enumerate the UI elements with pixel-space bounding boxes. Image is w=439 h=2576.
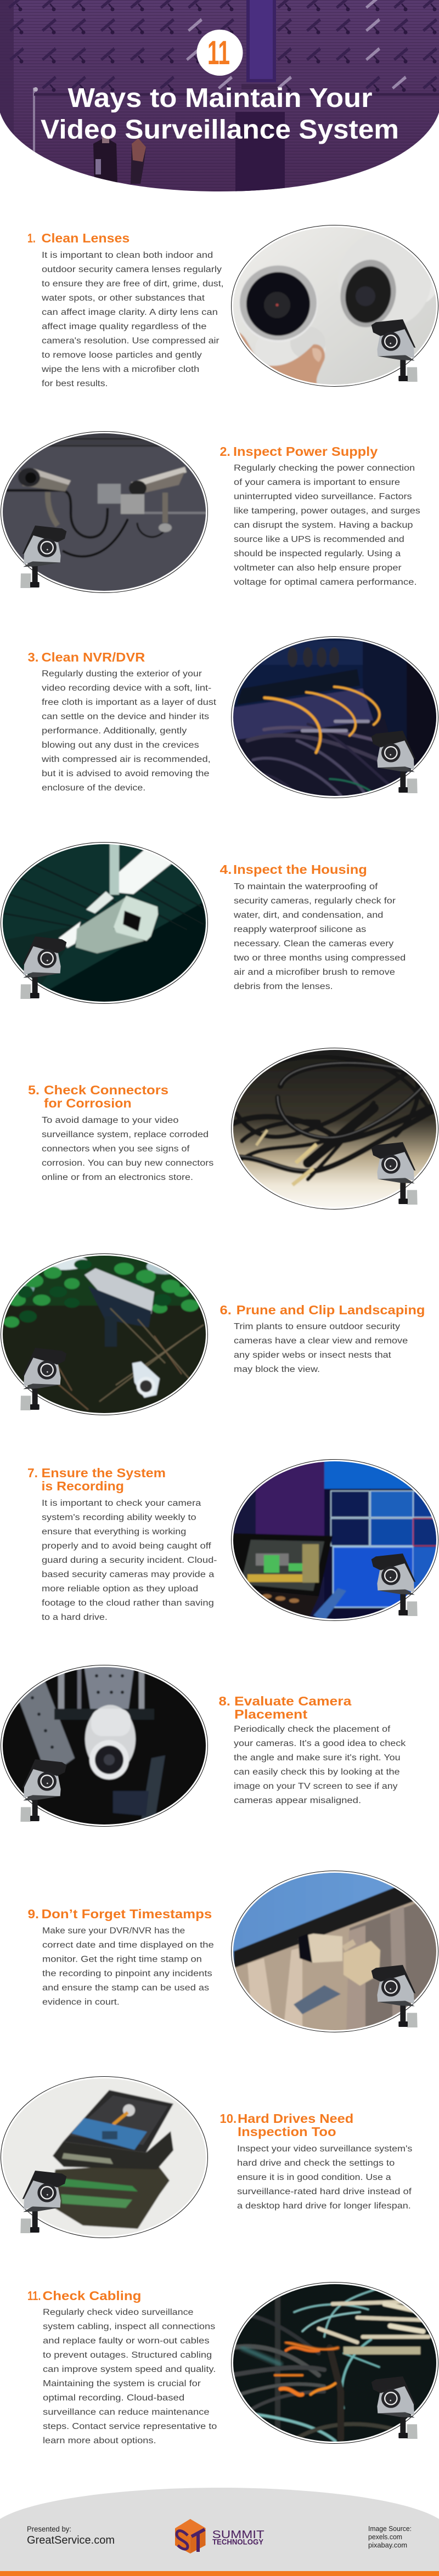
text: hard drives: hard drive and check the settings to [237,2159,395,2168]
text: clean lenses: to ensure they are free of dirt, grime, dust, [42,279,224,289]
text: check cabling: and replace faulty or worn-out cables [43,2336,210,2346]
text: inspect the housing: debris from the lenses. [234,982,333,991]
heading: clean nvr/dvr: Clean NVR/DVR [42,650,145,664]
text: ensure recording: ensure that everything is working [42,1527,186,1536]
heading: evaluate camera placement: Evaluate Camera [234,1694,352,1708]
text: clean lenses: affect image quality regardless of the [42,322,206,331]
panel: 2 inspect power supply [1,431,420,593]
text: ensure recording: guard during a security incident. Cloud- [42,1556,217,1565]
text: presented by: Presented by: [27,2525,71,2533]
text: prune and clip [234,1322,408,1374]
text: inspect power supply [234,464,420,587]
text: presented by: GreatService.com [27,2534,115,2546]
text: evaluate placement: Periodically check the placement of [234,1725,391,1734]
text: clean lenses: water spots, or other substances that [41,293,205,303]
text: hard drives [237,2144,413,2211]
text: prune and clip: any spider webs or insect nests that [234,1351,392,1360]
text: inspect the housing [233,882,406,991]
heading: hard drives need inspection too: Hard Drives Need [238,2111,353,2126]
text: clean lenses: to remove loose particles and gently [42,351,202,360]
photo: tangled network cables [231,2282,438,2444]
text: inspect power supply: voltage for optimal camera performance. [234,578,417,587]
heading: don't forget timestamps: Don’t Forget Timestamps [42,1907,212,1921]
text: clean nvr/dvr: can settle on the device and hinder its [42,712,209,721]
text: inspect the housing: To maintain the waterproofing of [234,882,378,891]
panel: 7 ensure the system is recording [27,1459,438,1622]
text: evaluate placement [234,1725,406,1805]
icon: small camera [372,1965,418,2027]
text: inspect the housing: security cameras, regularly check for [234,896,396,906]
panel: 11 check cabling [27,2282,438,2445]
text: clean lenses [41,251,224,388]
logo: summit technology [175,2519,264,2554]
text: check cabling: surveillance can reduce maintenance [43,2408,210,2417]
panel: 3 clean nvr/dvr [27,636,439,798]
text: ensure recording: footage to the cloud rather than saving [42,1598,214,1608]
text: ensure recording: It is important to check your camera [42,1499,201,1508]
heading: check connectors for corrosion [28,1083,168,1110]
text: ensure recording [42,1499,217,1622]
text: inspect power supply: source like a UPS is recommended and [234,535,404,544]
photo: bullet camera on metal wall [231,1871,438,2032]
text: clean nvr/dvr: performance. Additionally, gently [42,726,187,736]
photo: dome cameras held in hand [231,225,439,387]
logo: summit technology: SUMMIT [212,2529,264,2541]
title: Ways to Maintain Your [68,83,372,113]
panel: 9 dont forget timestamps [27,1871,438,2032]
heading: ensure the system is recording: Ensure the System [42,1466,166,1480]
text: clean lenses: wipe the lens with a microfiber cloth [41,365,199,374]
icon: small camera [20,526,66,588]
icon: small camera [372,319,418,382]
number badge: 11: 11 [207,34,230,71]
text: clean nvr/dvr: Regularly dusting the exterior of your [42,669,202,679]
text: inspect power supply: uninterrupted video surveillance. Factors [234,492,412,501]
heading: clean lenses: Clean Lenses [42,231,130,245]
text: timestamps [42,1927,214,2007]
photo: white dome camera on ceiling [1,1665,208,1827]
text: image source: pixabay.com [368,2541,407,2549]
photo: monitor wall and control desk [231,1459,438,1621]
text: inspect the housing: water, dirt, and condensation, and [233,911,383,920]
text: timestamps: monitor. Get the right time stamp on [42,1955,202,1964]
text: prune and clip: cameras have a clear view and remove [234,1336,408,1346]
heading: check connectors for corrosion: 5. [28,1083,40,1097]
text: timestamps: evidence in court. [42,1998,120,2007]
heading: clean nvr/dvr: 3. [27,650,38,664]
text: check cabling: optimal recording. Cloud-based [43,2393,184,2403]
panel: 6 prune and clip landscaping [1,1253,425,1415]
text: check cabling: Regularly check video surveillance [43,2308,193,2317]
text: ensure recording: based security cameras may provide a [42,1570,215,1579]
heading: don't forget timestamps: 9. [27,1907,39,1921]
heading: inspect the housing: Inspect the Housing [233,862,367,877]
heading: inspect power supply: 2. [219,444,230,459]
text: check cabling: can improve system speed and quality. [43,2365,216,2374]
text: check connectors: connectors when you see signs of [42,1144,190,1154]
heading: ensure the system is recording: is Recording [42,1479,124,1493]
heading: prune and clip landscaping: Prune and Clip Landscaping [237,1303,425,1317]
text: clean nvr/dvr [41,669,217,793]
heading: evaluate camera placement: Placement [234,1707,308,1721]
text: presented by [27,2525,115,2546]
text: check connectors [42,1116,214,1182]
text: prune and clip: Trim plants to ensure outdoor security [234,1322,400,1331]
text: check cabling: steps. Contact service representative to [43,2422,217,2431]
text: image source: Image Source: [368,2525,412,2533]
text: evaluate placement: your cameras. It's a good idea to check [234,1739,406,1748]
text: ensure recording: properly and to avoid being caught off [42,1541,212,1551]
text: clean lenses: for best results. [42,379,108,388]
text: timestamps: correct date and time displayed on the [42,1941,214,1950]
panel: 1 clean lenses [27,225,439,388]
panel: 10 hard drives need inspection [1,2076,413,2238]
text: hard drives: Inspect your video surveillance system's [237,2144,413,2154]
text: clean nvr/dvr: video recording device with a soft, lint- [42,683,211,693]
text: inspect power supply: Regularly checking the power connection [234,464,415,473]
text: clean lenses: outdoor security camera lenses regularly [42,265,222,274]
text: check cabling: Maintaining the system is crucial for [43,2379,201,2388]
icon: small camera [372,1142,418,1205]
text: inspect power supply: should be inspected regularly. Using a [234,549,401,558]
text: hard drives: a desktop hard drive for longer lifespan. [237,2201,411,2211]
text: evaluate placement: the angle and make sure it's right. You [234,1753,401,1762]
text: evaluate placement: can easily check this by looking at the [234,1767,400,1777]
text: inspect power supply: can disrupt the system. Having a backup [234,521,413,530]
text: inspect the housing: necessary. Clean the cameras every [234,939,394,948]
text: ensure recording: to a hard drive. [42,1613,108,1622]
text: clean nvr/dvr: enclosure of the device. [42,783,145,793]
heading: ensure the system is recording [27,1466,166,1493]
heading: hard drives need inspection too [219,2111,353,2139]
icon: small camera [20,936,66,999]
heading: hard drives need inspection too: 10. [219,2111,237,2126]
photo: bullet cameras on grey wall [1,431,208,593]
text: image source: pexels.com [368,2533,402,2541]
text: hard drives: ensure it is in good condition. Use a [237,2173,391,2182]
text: evaluate placement: cameras appear misaligned. [234,1796,361,1805]
text: check connectors: online or from an electronics store. [42,1173,193,1182]
text: check connectors: To avoid damage to your video [42,1116,179,1125]
photo: nvr rack with orange cables [231,636,439,798]
text: inspect the housing: reapply waterproof silicone as [234,925,367,934]
text: clean nvr/dvr: but it is advised to avoid removing the [42,769,210,778]
photo: housing camera under ceiling [1,842,208,1004]
heading: check cabling: Check Cabling [43,2289,142,2303]
icon: small camera [20,1759,66,1822]
heading: inspect the housing: 4. [219,862,232,877]
text: clean nvr/dvr: free cloth is important as a layer of dust [42,698,217,707]
text: clean lenses: can affect image clarity. A dirty lens can [42,308,218,317]
photo: black audio cables [231,1048,438,1210]
text: inspect the housing: air and a microfiber brush to remove [234,968,395,977]
heading: inspect power supply: Inspect Power Supply [233,444,378,459]
text: inspect power supply: like tampering, power outages, and surges [234,506,420,516]
panel: 8 evaluate camera placement [1,1665,406,1827]
heading: check connectors for corrosion: for Corrosion [44,1096,132,1110]
heading: check connectors for corrosion: Check Connectors [44,1083,168,1097]
icon: small camera [372,2376,418,2439]
heading: check cabling: 11. [27,2289,41,2303]
heading: hard drives need inspection too: Inspection Too [238,2125,336,2139]
text: ensure recording: system's recording ability weekly to [42,1513,196,1522]
text: clean lenses: camera's resolution. Use compressed air [42,336,219,346]
text: check connectors: surveillance system, replace corroded [42,1130,209,1139]
text: clean lenses: It is important to clean both indoor and [42,251,213,260]
heading: clean lenses: 1. [27,231,36,245]
text: check cabling: system cabling, inspect all connections [43,2322,216,2331]
number badge: 11 [196,30,243,76]
text: clean nvr/dvr: with compressed air is recommended, [41,755,211,764]
heading: ensure the system is recording: 7. [27,1466,38,1480]
text: timestamps: Make sure your DVR/NVR has the [42,1927,185,1935]
footer [0,2488,439,2576]
text: inspect power supply: voltmeter can also help ensure proper [234,563,402,573]
icon: small camera [372,1553,418,1616]
text: check cabling [43,2308,217,2445]
icon: small camera [20,1348,66,1410]
heading: evaluate camera placement [218,1694,352,1721]
heading: evaluate camera placement: 8. [218,1694,230,1708]
panel: 5 check connectors [28,1048,438,1210]
title [41,83,399,145]
text: clean nvr/dvr: blowing out any dust in the crevices [42,741,199,750]
text: image source [368,2525,412,2549]
icon: small camera [20,2171,66,2233]
photo: cameras in ivy [1,1253,209,1415]
photo: stack of hard drives [1,2076,208,2238]
text: prune and clip: may block the view. [234,1365,320,1374]
logo: summit technology: TECHNOLOGY [212,2538,264,2546]
text: evaluate placement: image on your TV screen to see if any [234,1782,398,1791]
icon: small camera [372,731,418,793]
heading: prune and clip landscaping: 6. [219,1303,232,1317]
text: hard drives: surveillance-rated hard drive instead of [237,2187,412,2196]
text: timestamps: and ensure the stamp can be used as [42,1984,209,1992]
text: inspect the housing: two or three months using compressed [234,953,406,963]
text: check cabling: learn more about options. [43,2436,156,2445]
text: ensure recording: more reliable option as they upload [42,1584,198,1594]
panel: 4 inspect the housing [1,842,406,1004]
title: Video Surveillance System [41,115,399,145]
text: timestamps: the recording to pinpoint any incidents [42,1969,212,1978]
header banner [0,0,439,192]
text: check cabling: to prevent outages. Structured cabling [43,2351,212,2360]
text: inspect power supply: of your camera is important to ensure [234,478,400,487]
text: check connectors: corrosion. You can buy new connectors [42,1159,214,1168]
